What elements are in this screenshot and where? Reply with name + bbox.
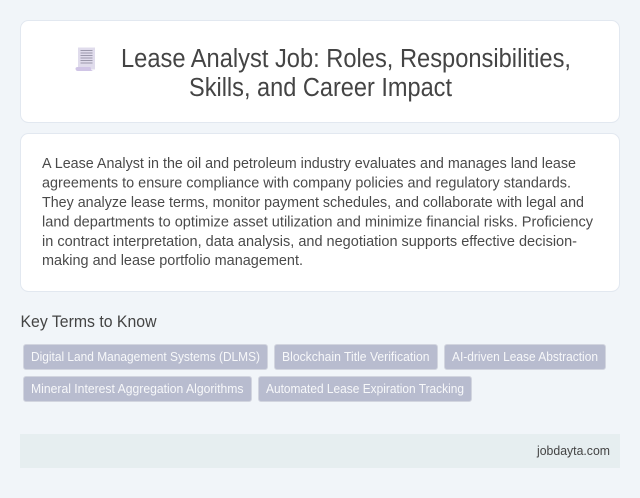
icon: lease document <box>76 48 95 71</box>
chip: AI-driven: AI-driven Lease Abstraction <box>452 350 598 364</box>
chip: DLMS: Digital Land Management Systems (DLMS) <box>31 350 260 364</box>
footer <box>20 434 620 468</box>
title: Skills, and Career Impact <box>189 74 452 102</box>
chip: blockchain: Blockchain Title Verification <box>282 350 430 364</box>
text block: description: agreements to ensure compliance with company policies and regulatory standards. <box>42 176 571 192</box>
text block: description: A Lease Analyst in the oil and petroleum industry evaluates and manages land lease <box>42 156 576 172</box>
panel: description card <box>20 134 620 292</box>
chip: expiration tracking <box>258 376 472 402</box>
text block: description <box>42 156 594 269</box>
text block: description: land departments to optimize asset utilization and minimize financial risks. Proficiency <box>42 214 594 230</box>
text block: description: making and lease portfolio management. <box>42 253 303 269</box>
title <box>121 45 571 102</box>
chip: DLMS <box>24 344 268 370</box>
heading: key terms: Key Terms to Know <box>20 313 157 331</box>
text block: description: in contract interpretation, data analysis, and negotiation supports effective decision- <box>42 234 577 250</box>
title: Lease Analyst Job: Roles, Responsibilities, <box>121 45 571 73</box>
chip: blockchain <box>274 344 438 370</box>
chips: key terms <box>24 344 606 402</box>
chip: AI-driven <box>444 344 606 370</box>
chip: mineral interest <box>24 376 252 402</box>
text block: description: They analyze lease terms, monitor payment schedules, and collaborate with legal and <box>42 195 584 211</box>
chip: expiration tracking: Automated Lease Expiration Tracking <box>266 382 464 396</box>
footer: jobdayta.com <box>536 444 610 458</box>
panel: title card <box>20 20 620 122</box>
chip: mineral interest: Mineral Interest Aggregation Algorithms <box>31 382 244 396</box>
